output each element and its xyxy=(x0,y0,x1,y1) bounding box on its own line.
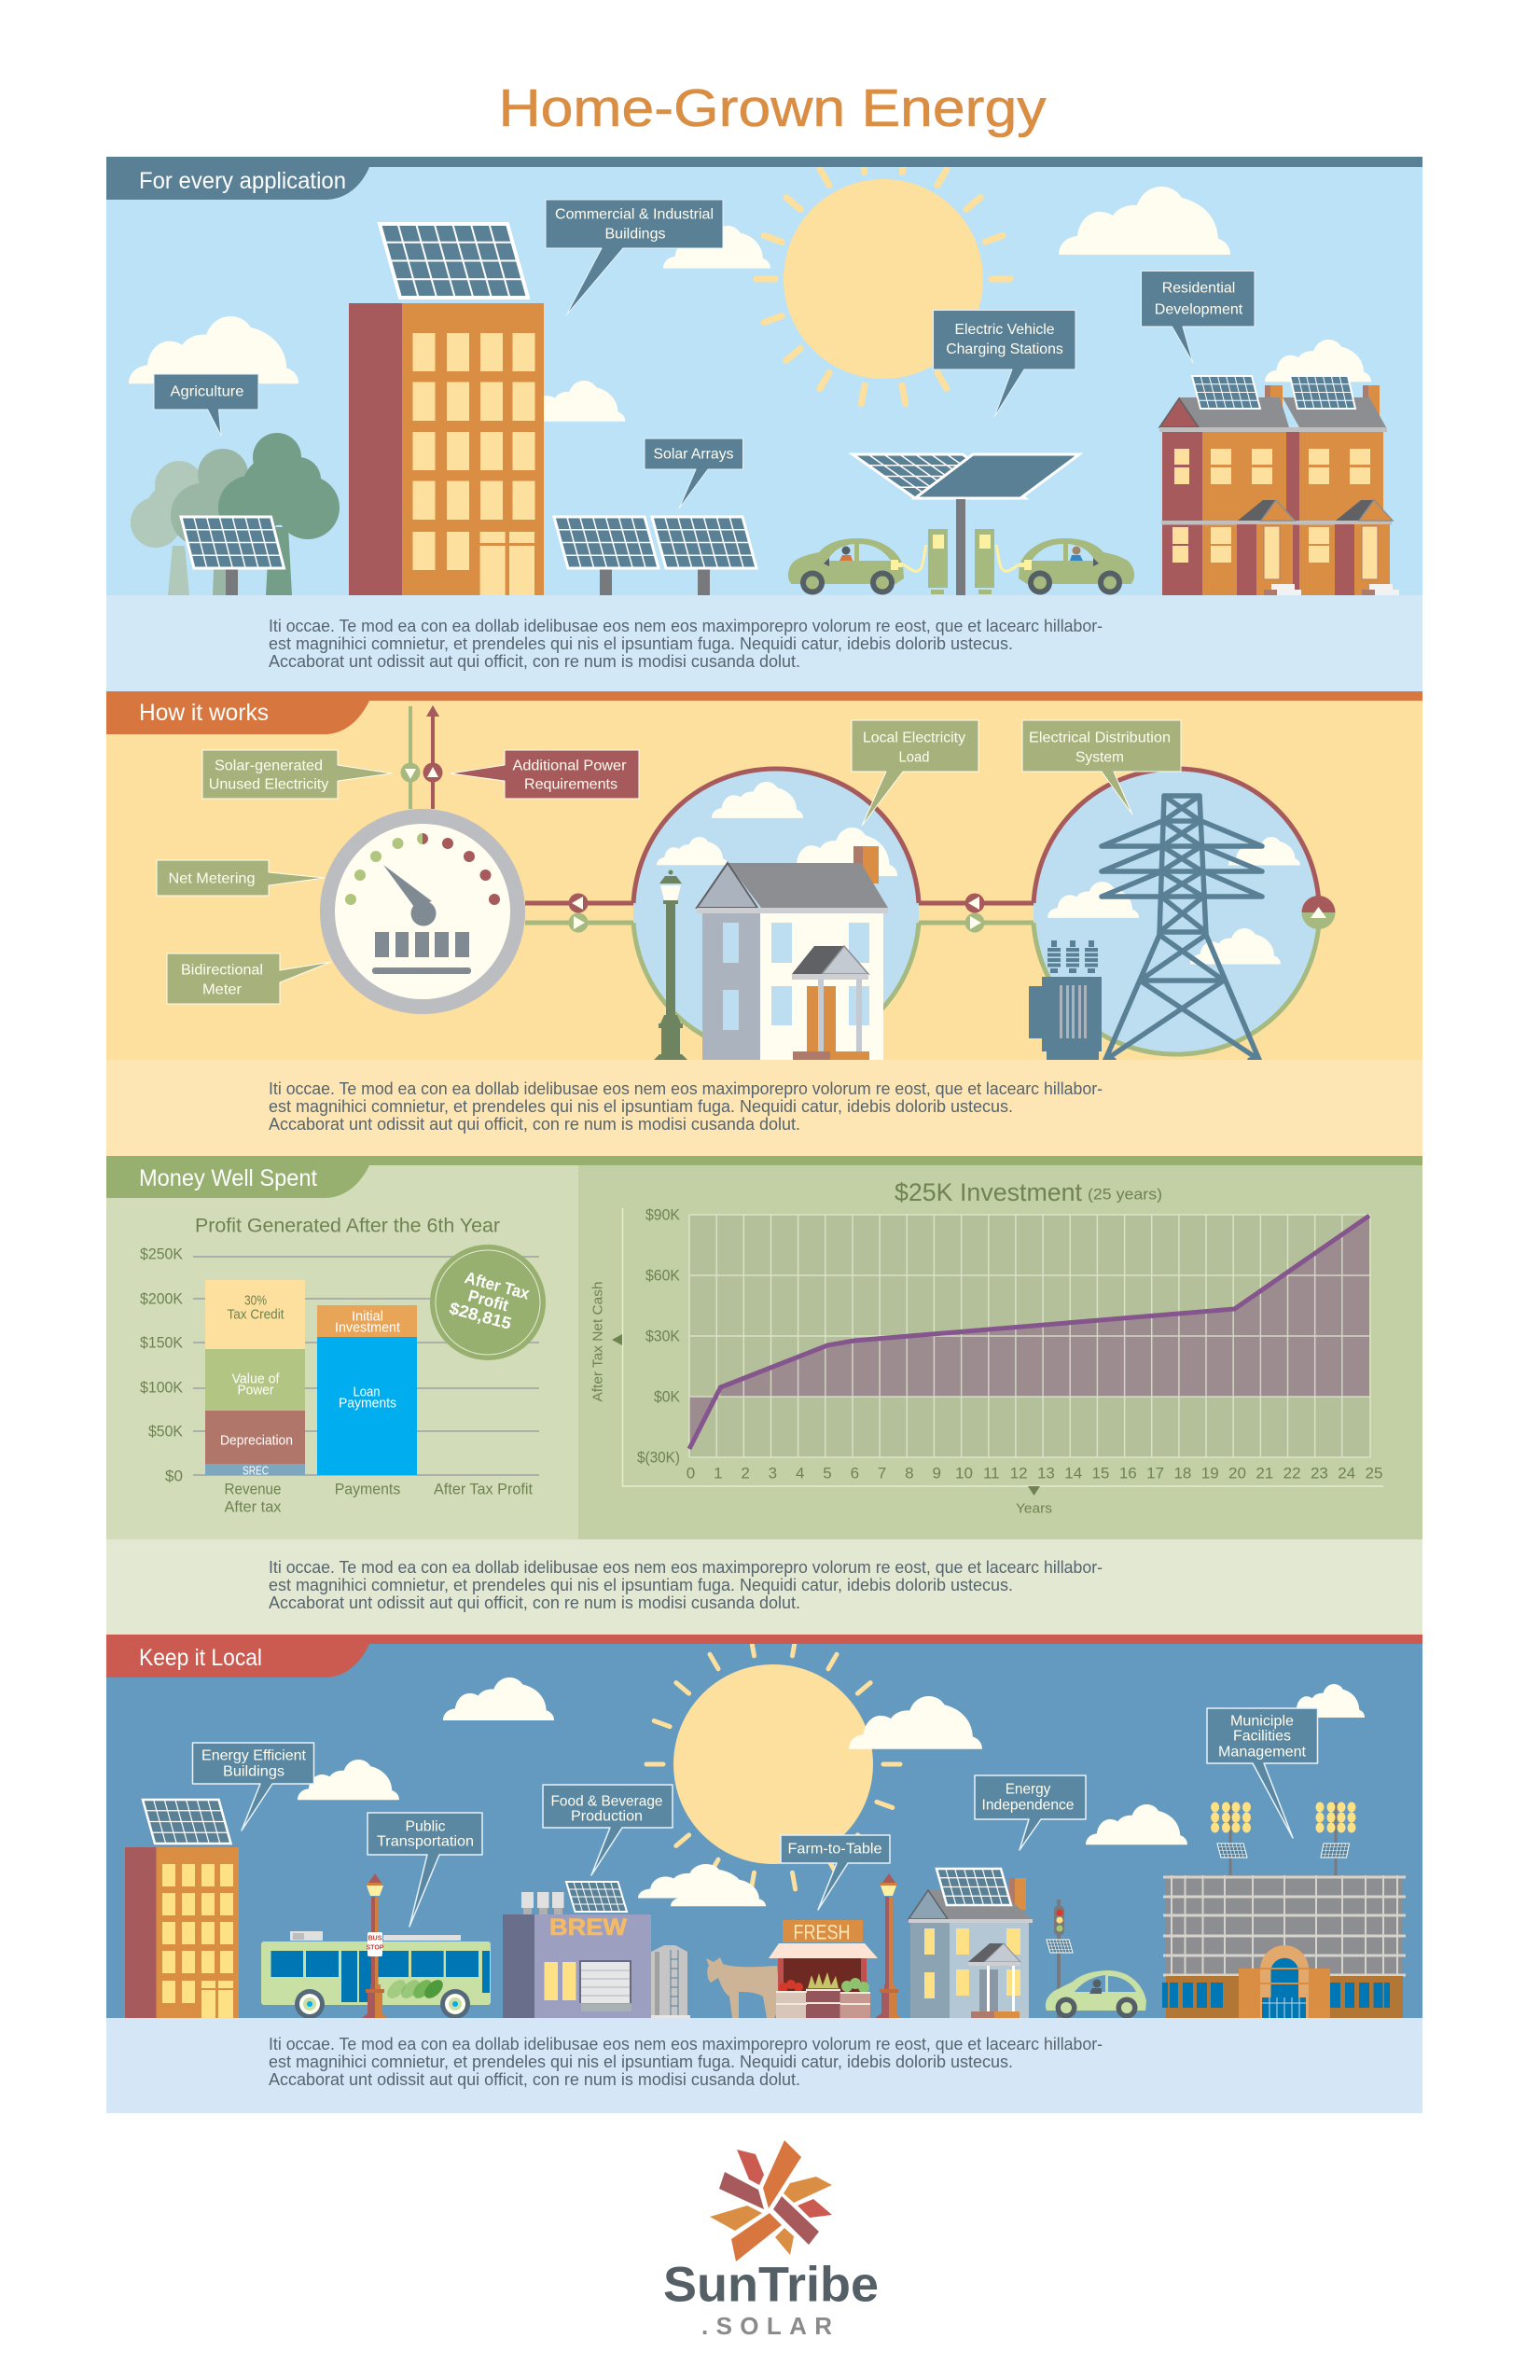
callout: local electricity load: Load xyxy=(899,750,929,765)
x axis labels: Payments xyxy=(335,1480,400,1498)
x axis labels: After tax xyxy=(224,1498,282,1515)
callout: net metering: Net Metering xyxy=(168,871,256,886)
building with rooftop solar xyxy=(349,224,544,595)
callout: residential development: Development xyxy=(1155,302,1243,317)
line chart: 25K investment: 18 xyxy=(1173,1465,1191,1482)
line chart: 25K investment: 25 xyxy=(1366,1465,1382,1482)
panel: keep it local xyxy=(106,1635,1422,2113)
section tab: how it works: How it works xyxy=(139,700,269,726)
line chart: 25K investment: 13 xyxy=(1037,1465,1055,1482)
callout: residential development xyxy=(1142,271,1255,363)
transformer xyxy=(1029,940,1102,1060)
bar chart: profit generated: $250K xyxy=(140,1245,184,1263)
section tab: for every application xyxy=(106,157,1422,200)
transmission tower xyxy=(1102,796,1262,1060)
panel: for every application xyxy=(106,157,1422,691)
caption: keep it local: est magnihici comnietur, et prendeles qui nis el ipsuntiam fuga. Nequidi catur, idebis dolorib ustecus. xyxy=(269,2053,1013,2071)
caption: money well spent xyxy=(106,1539,1422,1635)
y axis title xyxy=(590,1282,622,1401)
lamp post and bus stop: BUS xyxy=(368,1935,382,1942)
line chart: 25K investment: 16 xyxy=(1119,1465,1137,1482)
farm stand: FRESH xyxy=(793,1920,851,1944)
bar: payments xyxy=(317,1305,417,1475)
lamp post and bus stop xyxy=(362,1873,387,2018)
bar: revenue after tax: Value of xyxy=(231,1371,280,1386)
line chart: 25K investment: 7 xyxy=(878,1465,886,1482)
callout: electric vehicle charging stations xyxy=(933,310,1075,417)
badge: after tax profit: $28,815 xyxy=(448,1299,513,1333)
callout: municiple facilities management: Facilities xyxy=(1233,1728,1291,1745)
bar: payments: Investment xyxy=(335,1319,401,1336)
bar chart: profit generated: $150K xyxy=(140,1334,184,1351)
blue sky background xyxy=(106,1635,1422,2018)
bar: payments: Initial xyxy=(352,1308,383,1325)
grid circle xyxy=(1034,769,1319,1054)
line chart: 25K investment: $0K xyxy=(654,1388,681,1405)
line chart: 25K investment: 9 xyxy=(932,1465,941,1482)
brewery xyxy=(503,1882,651,2018)
x axis title: Years xyxy=(1016,1500,1052,1517)
callout: public transportation: Public xyxy=(405,1819,446,1834)
bar chart: profit generated: $50K xyxy=(148,1422,184,1441)
callout: commercial and industrial buildings: Commercial & Industrial xyxy=(555,207,714,222)
callout: bidirectional meter xyxy=(167,953,331,1004)
line chart: 25K investment: 6 xyxy=(851,1465,859,1482)
clouds xyxy=(298,1677,1365,1906)
line chart: 25K investment: 21 xyxy=(1256,1465,1273,1482)
car xyxy=(1046,1970,1146,2019)
line chart: 25K investment: 11 xyxy=(983,1465,1000,1482)
line chart title: (25 years) xyxy=(1088,1185,1162,1204)
callout: solar-generated unused electricity: Solar-generated xyxy=(215,758,323,774)
line chart: 25K investment: 3 xyxy=(769,1465,777,1482)
badge: after tax profit: Profit xyxy=(466,1287,510,1315)
silo xyxy=(651,1945,690,2018)
callout: public transportation: Transportation xyxy=(377,1834,474,1849)
panel: how it works xyxy=(106,691,1422,1156)
line chart: 25K investment: 22 xyxy=(1283,1465,1301,1482)
logo: SunTribe Solar xyxy=(663,2140,879,2340)
solar panel: agriculture xyxy=(181,517,284,595)
bar: payments: Payments xyxy=(339,1396,396,1411)
line chart: 25K investment: 19 xyxy=(1201,1465,1219,1482)
callout: food and beverage production: Food & Beverage xyxy=(550,1793,663,1810)
section tab: how it works xyxy=(106,691,1422,734)
callout: bidirectional meter: Bidirectional xyxy=(181,963,263,978)
wordmark subline: .SOLAR xyxy=(701,2312,832,2340)
caption: applications: Accaborat unt odissit aut qui officit, con re num is modisi cusanda dolut. xyxy=(269,652,800,671)
caption: how it works xyxy=(106,1060,1422,1156)
callout: solar arrays: Solar Arrays xyxy=(653,446,733,463)
caption: how it works: Iti occae. Te mod ea con ea dollab idelibusae eos nem eos maximporepro volorum re eost, que et lacearc hillabor- xyxy=(269,1079,1103,1098)
callout: municiple facilities management: Municiple xyxy=(1230,1713,1294,1730)
callout: food and beverage production xyxy=(543,1785,673,1875)
bar chart: profit generated: $0 xyxy=(165,1467,183,1485)
line chart: 25K investment: 5 xyxy=(823,1465,832,1482)
callout: commercial and industrial buildings: Buildings xyxy=(604,226,666,243)
line chart: 25K investment: 1 xyxy=(714,1465,723,1482)
section tab: keep it local: Keep it Local xyxy=(139,1645,262,1671)
bar chart: profit generated: $200K xyxy=(140,1289,184,1308)
right background xyxy=(578,1156,1422,1539)
line chart: 25K investment: 0 xyxy=(687,1465,695,1482)
caption: money well spent: Accaborat unt odissit aut qui officit, con re num is modisi cusanda dolut. xyxy=(269,1594,800,1612)
title: Home-Grown Energy xyxy=(498,78,1047,138)
house xyxy=(697,846,888,1060)
line chart: 25K investment: 23 xyxy=(1311,1465,1328,1482)
icon: sun mark xyxy=(710,2140,832,2262)
line chart: 25K investment: $(30K) xyxy=(637,1448,680,1467)
callout: additional power requirements xyxy=(451,750,639,799)
badge: after tax profit xyxy=(430,1245,546,1360)
section tab: for every application: For every application xyxy=(139,168,346,194)
callout: municiple facilities management xyxy=(1207,1708,1317,1838)
left background xyxy=(106,1156,578,1539)
electric car left xyxy=(788,538,904,595)
callout: municiple facilities management: Management xyxy=(1218,1745,1307,1760)
lamp post and bus stop: STOP xyxy=(367,1944,384,1952)
callout: local electricity load xyxy=(852,720,978,826)
EV charging station xyxy=(853,454,1079,595)
line chart: 25K investment: 12 xyxy=(1010,1465,1028,1482)
floodlights with solar xyxy=(1211,1802,1356,1875)
callout: additional power requirements: Requirements xyxy=(524,776,617,793)
connectors up from meter xyxy=(401,705,442,809)
line chart: 25K investment: 14 xyxy=(1064,1465,1082,1482)
callout: public transportation xyxy=(368,1813,482,1927)
cow xyxy=(706,1957,781,2018)
line chart: 25K investment: 2 xyxy=(741,1465,750,1482)
callout: solar-generated unused electricity xyxy=(202,750,392,799)
callout: local electricity load: Local Electricity xyxy=(863,730,965,746)
callout: residential development: Residential xyxy=(1162,280,1235,297)
line chart: 25K investment: $60K xyxy=(645,1267,681,1284)
caption: money well spent: Iti occae. Te mod ea con ea dollab idelibusae eos nem eos maximporepro volorum re eost, que et lacearc hillabor- xyxy=(269,1558,1103,1577)
caption: how it works: Accaborat unt odissit aut qui officit, con re num is modisi cusanda dolut. xyxy=(269,1115,800,1134)
connectors between circles xyxy=(525,894,1034,933)
callout: solar-generated unused electricity: Unused Electricity xyxy=(209,776,328,793)
callout: electrical distribution system xyxy=(1022,720,1181,814)
bar: payments: Loan xyxy=(353,1385,381,1399)
line chart: 25K investment: 15 xyxy=(1092,1465,1109,1482)
panel: money well spent xyxy=(106,1156,1422,1635)
traffic light xyxy=(1047,1900,1073,2018)
line chart: 25K investment: $30K xyxy=(645,1327,681,1345)
callout: electrical distribution system: Electrical Distribution xyxy=(1029,730,1171,746)
caption: how it works: est magnihici comnietur, et prendeles qui nis el ipsuntiam fuga. Nequidi catur, idebis dolorib ustecus. xyxy=(269,1097,1013,1116)
sky background xyxy=(106,157,1422,595)
farm stand xyxy=(769,1920,878,2018)
badge: after tax profit: After Tax xyxy=(463,1268,532,1303)
callout: electric vehicle charging stations: Charging Stations xyxy=(946,341,1063,357)
bar chart: profit generated xyxy=(140,1215,546,1515)
callout: net metering xyxy=(157,860,325,896)
solar arrays xyxy=(554,517,756,595)
bus xyxy=(261,1931,491,2019)
bar chart title: Profit Generated After the 6th Year xyxy=(195,1215,500,1237)
grid connection badge xyxy=(1302,896,1336,929)
caption: applications: Iti occae. Te mod ea con ea dollab idelibusae eos nem eos maximporepro volorum re eost, que et lacearc hillabor- xyxy=(269,617,1103,635)
x axis labels: Revenue xyxy=(224,1480,282,1498)
line chart: 25K investment: 10 xyxy=(955,1465,973,1482)
section tab: keep it local xyxy=(106,1635,1422,1677)
callout: energy independence: Energy xyxy=(1006,1782,1050,1797)
callout: agriculture xyxy=(154,374,258,436)
callout: electrical distribution system: System xyxy=(1075,750,1124,765)
caption: applications xyxy=(106,595,1422,691)
caption: keep it local: Accaborat unt odissit aut qui officit, con re num is modisi cusanda dolut. xyxy=(269,2070,800,2089)
bar: revenue after tax: SREC xyxy=(243,1463,269,1478)
line chart: 25K investment: 24 xyxy=(1338,1465,1355,1482)
caption: keep it local: Iti occae. Te mod ea con ea dollab idelibusae eos nem eos maximporepro volorum re eost, que et lacearc hillabor- xyxy=(269,2035,1103,2053)
bar: revenue after tax: Tax Credit xyxy=(228,1306,284,1323)
callout: energy independence xyxy=(975,1775,1086,1850)
caption: applications: est magnihici comnietur, et prendeles qui nis el ipsuntiam fuga. Nequidi catur, idebis dolorib ustecus. xyxy=(269,634,1013,653)
callout: solar arrays xyxy=(645,438,742,508)
line chart: 25K investment: 8 xyxy=(905,1465,914,1482)
callout: energy efficient buildings xyxy=(192,1743,313,1830)
callout: energy efficient buildings: Energy Efficient xyxy=(201,1748,307,1763)
house circle xyxy=(633,769,919,1054)
brewery: BREW xyxy=(549,1914,627,1941)
callout: farm-to-table xyxy=(781,1835,890,1910)
street lamp xyxy=(654,870,687,1060)
callout: commercial and industrial buildings xyxy=(546,200,723,315)
bar: revenue after tax xyxy=(205,1280,305,1478)
clouds xyxy=(129,187,1371,422)
electric car right xyxy=(1019,538,1134,595)
bar: revenue after tax: Power xyxy=(237,1383,274,1398)
x axis title xyxy=(1016,1486,1052,1517)
x axis labels xyxy=(224,1480,533,1515)
caption: keep it local xyxy=(106,2018,1422,2113)
callout: energy independence: Independence xyxy=(981,1797,1075,1814)
callout: farm-to-table: Farm-to-Table xyxy=(787,1842,882,1857)
line chart: 25K investment xyxy=(590,1178,1383,1517)
yellow background xyxy=(106,691,1422,1060)
callout: bidirectional meter: Meter xyxy=(202,981,243,998)
line chart title: $25K Investment xyxy=(895,1178,1082,1206)
sun xyxy=(646,1639,900,1889)
bar chart: profit generated: $100K xyxy=(140,1379,184,1396)
line chart: 25K investment: $90K xyxy=(645,1205,681,1224)
bidirectional meter xyxy=(320,809,525,1014)
house with solar xyxy=(909,1869,1033,2018)
callout: agriculture: Agriculture xyxy=(170,384,244,399)
caption: money well spent: est magnihici comnietur, et prendeles qui nis el ipsuntiam fuga. Nequidi catur, idebis dolorib ustecus. xyxy=(269,1576,1013,1594)
callout: energy efficient buildings: Buildings xyxy=(223,1763,284,1780)
efficient building xyxy=(125,1800,239,2018)
line chart: 25K investment: 20 xyxy=(1228,1465,1246,1482)
callout: additional power requirements: Additional Power xyxy=(513,758,627,774)
stadium xyxy=(1162,1875,1406,2018)
section tab: money well spent: Money Well Spent xyxy=(139,1165,317,1191)
lamp post xyxy=(875,1873,901,2018)
line chart: 25K investment: 4 xyxy=(796,1465,804,1482)
callout: electric vehicle charging stations: Electric Vehicle xyxy=(955,322,1055,338)
trees xyxy=(131,433,340,595)
x axis labels: After Tax Profit xyxy=(434,1480,533,1498)
y axis title: After Tax Net Cash xyxy=(590,1282,606,1401)
line chart: 25K investment: 17 xyxy=(1146,1465,1164,1482)
bar: revenue after tax: 30% xyxy=(244,1293,267,1308)
wordmark: SunTribe xyxy=(663,2258,879,2312)
bar: revenue after tax: Depreciation xyxy=(220,1433,293,1448)
houses with solar xyxy=(1159,376,1399,595)
section tab: money well spent xyxy=(106,1156,1422,1198)
callout: food and beverage production: Production xyxy=(571,1808,643,1825)
sun xyxy=(756,167,1010,404)
